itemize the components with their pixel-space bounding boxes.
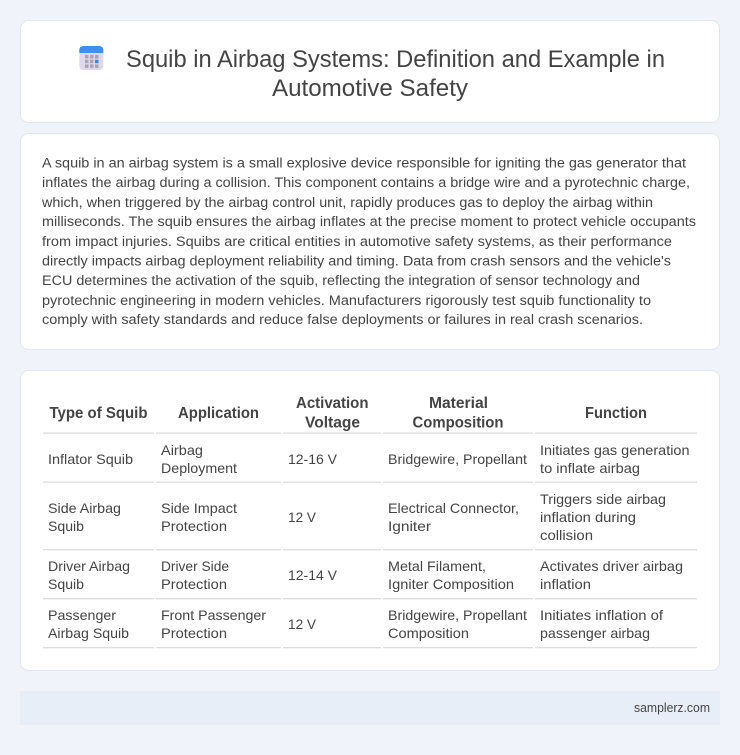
table row: passenger airbag squib: Bridgewire, Propellant — [388, 607, 527, 623]
text block: description paragraph: directly impacts airbag deployment reliability and timing. Data from crash sensors and the vehicle's — [42, 254, 671, 270]
table row: side airbag squib: Squib — [48, 518, 84, 534]
table row: passenger airbag squib: passenger airbag — [540, 625, 650, 641]
table row: side airbag squib: 12 V — [288, 509, 317, 525]
title: Squib in Airbag Systems: Definition and Example in — [126, 46, 665, 73]
text block: description paragraph: inflates the airbag during a collision. This component contains a bridge wire and a pyrotechnic charge, — [42, 175, 690, 191]
table header row: Activation — [296, 395, 368, 412]
table row: passenger airbag squib: Passenger — [48, 607, 116, 623]
table row: passenger airbag squib: Airbag Squib — [48, 625, 129, 641]
text block: description paragraph: milliseconds. The squib ensures the airbag inflates at the precise moment to protect vehicle occupants — [42, 214, 696, 230]
panel: title card — [20, 20, 720, 122]
table row: side airbag squib: Side Impact — [161, 500, 237, 516]
panel: description — [20, 134, 720, 350]
table row: driver airbag squib: Squib — [48, 576, 84, 592]
table header row: Function — [585, 405, 647, 422]
table row: passenger airbag squib: Initiates inflation of — [540, 607, 663, 623]
text block: description paragraph — [41, 156, 696, 328]
table row: inflator squib: Airbag — [161, 442, 203, 458]
table row: side airbag squib: Igniter — [388, 518, 431, 534]
table header row: Composition — [412, 414, 504, 432]
table header row — [50, 395, 647, 432]
table row: inflator squib — [48, 442, 690, 476]
panel: table card — [20, 370, 720, 670]
text block: description paragraph: A squib in an airbag system is a small explosive device responsible for igniting the gas generator that — [42, 156, 686, 172]
table row: side airbag squib: Protection — [161, 518, 227, 534]
title: Automotive Safety — [272, 75, 468, 102]
text block: description paragraph: comply with safety standards and reduce false deployments or failures in real crash scenarios. — [42, 312, 643, 328]
footer source text: samplerz.com — [634, 701, 710, 715]
table row: driver airbag squib: Activates driver airbag — [540, 558, 683, 574]
text block: description paragraph: from impact injuries. Squibs are critical entities in automotive safety systems, as their performance — [42, 234, 672, 250]
title — [126, 46, 665, 102]
table row: driver airbag squib: inflation — [540, 576, 591, 592]
table header row: Voltage — [305, 414, 360, 432]
table row: driver airbag squib — [48, 558, 683, 592]
text block: description paragraph: which, when triggered by the airbag control unit, rapidly produces gas to deploy the airbag within — [41, 195, 653, 211]
text block: description paragraph: ECU determines the activation of the squib, reflecting the integration of sensor technology and — [42, 273, 640, 289]
table row: driver airbag squib: Protection — [161, 576, 227, 592]
table row: side airbag squib: Side Airbag — [48, 500, 121, 516]
table row: inflator squib: Bridgewire, Propellant — [388, 451, 527, 467]
table row: driver airbag squib: Driver Side — [161, 558, 229, 574]
table header row: Material — [429, 395, 488, 412]
table header row: Application — [178, 405, 259, 422]
table row: side airbag squib: Triggers side airbag — [540, 491, 666, 507]
table row: driver airbag squib: Metal Filament, — [388, 558, 486, 574]
table row: inflator squib: to inflate airbag — [540, 460, 640, 476]
table row: driver airbag squib: Driver Airbag — [48, 558, 130, 574]
footer bar — [20, 691, 720, 725]
table row: inflator squib: 12-16 V — [288, 451, 338, 467]
table row: passenger airbag squib: Front Passenger — [161, 607, 266, 623]
table row: side airbag squib: collision — [540, 527, 593, 543]
table row: side airbag squib: Electrical Connector, — [388, 500, 519, 516]
table row: driver airbag squib: Igniter Composition — [388, 576, 514, 592]
table row: inflator squib: Inflator Squib — [48, 451, 133, 467]
text block: description paragraph: pyrotechnic engineering in modern vehicles. Manufacturers rigorously test squib functionality to — [42, 293, 651, 309]
table row: inflator squib: Deployment — [161, 460, 237, 476]
table row: passenger airbag squib — [48, 607, 663, 641]
table row: passenger airbag squib: 12 V — [288, 616, 317, 632]
table row: side airbag squib: inflation during — [540, 509, 636, 525]
icon: calendar — [79, 46, 103, 70]
table row: passenger airbag squib: Composition — [388, 625, 469, 641]
table row: inflator squib: Initiates gas generation — [540, 442, 690, 458]
table header row: Type of Squib — [50, 405, 148, 422]
table row: side airbag squib — [48, 491, 666, 543]
table row: passenger airbag squib: Protection — [161, 625, 227, 641]
table row: driver airbag squib: 12-14 V — [288, 567, 338, 583]
